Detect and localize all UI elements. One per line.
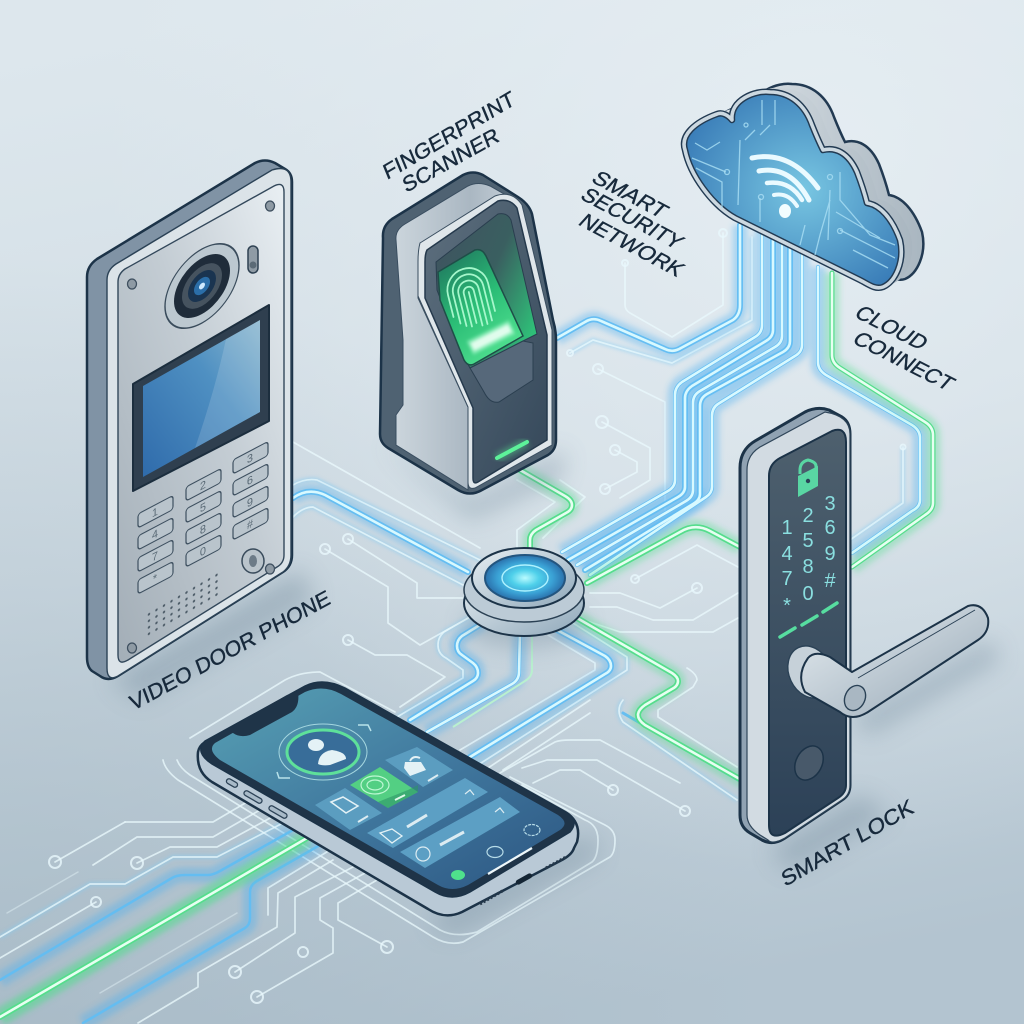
fingerprint (443, 263, 498, 333)
label: cloud connect: CONNECT (848, 327, 960, 395)
label: smart security network: NETWORK (574, 210, 690, 281)
device: smart lock (740, 408, 988, 843)
keypad: 7 (152, 549, 158, 564)
thin pale circuit lines (0, 233, 903, 1023)
keypad numbers: 2 (802, 505, 814, 527)
keypad numbers: * (783, 595, 791, 617)
wifi icon (752, 157, 818, 218)
status LED (497, 442, 527, 458)
lower lip (470, 341, 533, 402)
keypad numbers: 1 (781, 517, 793, 539)
keypad numbers: 7 (781, 568, 793, 590)
keypad: 5 (200, 500, 206, 515)
sensor pad (438, 250, 523, 365)
keypad: 6 (247, 473, 253, 488)
lever handle (780, 605, 988, 717)
charging port and speakers (480, 857, 566, 904)
fingerprint card (350, 767, 418, 808)
phone body (198, 684, 578, 915)
chevrons (277, 725, 371, 778)
scanner silver band (418, 194, 552, 488)
device: video door phone (87, 160, 292, 679)
circuit network traces (0, 225, 933, 1023)
keypad numbers: 3 (824, 493, 836, 515)
label: smart security network: SECURITY (576, 184, 689, 253)
bottom app icons (451, 824, 540, 880)
keypad numbers: 8 (802, 556, 814, 578)
keypad numbers: # (824, 570, 836, 592)
profile ring (279, 724, 367, 780)
label: cloud connect (848, 301, 960, 395)
hub middle ring (464, 558, 584, 622)
indicator pill (248, 246, 258, 273)
device: smartphone (198, 682, 578, 915)
phone bezel (201, 682, 574, 897)
keypad: * (153, 571, 158, 586)
scanner bezel and lower face (425, 200, 547, 483)
screws (128, 201, 274, 653)
wide card one (367, 778, 488, 848)
keypad numbers (781, 493, 836, 617)
recessed cavity (436, 214, 537, 368)
keypad numbers: 4 (781, 543, 793, 565)
keypad: 2 (200, 478, 206, 493)
keypad: 4 (152, 527, 158, 542)
hub light (485, 555, 565, 601)
camera (165, 229, 239, 343)
lock body (740, 408, 850, 843)
keypad: 3 (247, 451, 253, 466)
door phone face plate (118, 184, 284, 662)
lock keypad panel (769, 430, 846, 836)
fingerprint button (789, 741, 829, 785)
scan light bar (470, 327, 512, 348)
video screen (133, 305, 269, 491)
blue glowing traces (0, 225, 920, 1023)
door phone front rim (107, 168, 291, 678)
halo on bright pale lines (0, 237, 903, 937)
side buttons (226, 778, 288, 819)
padlock icon (798, 460, 818, 497)
keypad: 1 (152, 505, 158, 520)
keypad numbers: 6 (824, 517, 836, 539)
speaker grille (146, 570, 221, 639)
label: fingerprint scanner: SCANNER (400, 124, 502, 198)
lock silver rim (747, 412, 850, 842)
soft shadows (110, 440, 1000, 935)
scanner body (380, 172, 556, 494)
keypad: 8 (200, 522, 206, 537)
keypad: 0 (200, 544, 206, 559)
cloud circuit pattern (692, 100, 895, 268)
call button (242, 549, 264, 573)
label: cloud connect: CLOUD (850, 301, 933, 354)
cloud extrusion (695, 84, 923, 284)
wide card two (400, 797, 520, 868)
notch (228, 692, 298, 736)
connector nodes (49, 229, 906, 1003)
lock card (385, 747, 453, 787)
cloud front face (684, 92, 901, 288)
label: smart lock: SMART LOCK (778, 795, 917, 892)
keypad (138, 441, 268, 594)
keypad: # (247, 517, 253, 532)
label: smart security network (574, 167, 690, 281)
central hub (464, 548, 584, 636)
status dashes (780, 603, 837, 637)
scanner silver side (396, 184, 520, 490)
hub top disk (472, 548, 576, 608)
label: fingerprint scanner: FINGERPRINT (380, 87, 518, 185)
hub base (464, 570, 584, 636)
device: cloud connect (684, 84, 923, 288)
device: fingerprint scanner (380, 172, 556, 494)
device card (315, 788, 382, 830)
phone screen (212, 688, 565, 889)
keypad numbers: 9 (824, 543, 836, 565)
keypad: 9 (247, 495, 253, 510)
keypad numbers: 0 (802, 583, 814, 605)
door phone body (87, 160, 292, 679)
label: video door phone: VIDEO DOOR PHONE (127, 586, 333, 716)
green glowing traces (0, 273, 933, 1017)
label: smart security network: SMART (587, 167, 674, 222)
keypad numbers: 5 (802, 530, 814, 552)
